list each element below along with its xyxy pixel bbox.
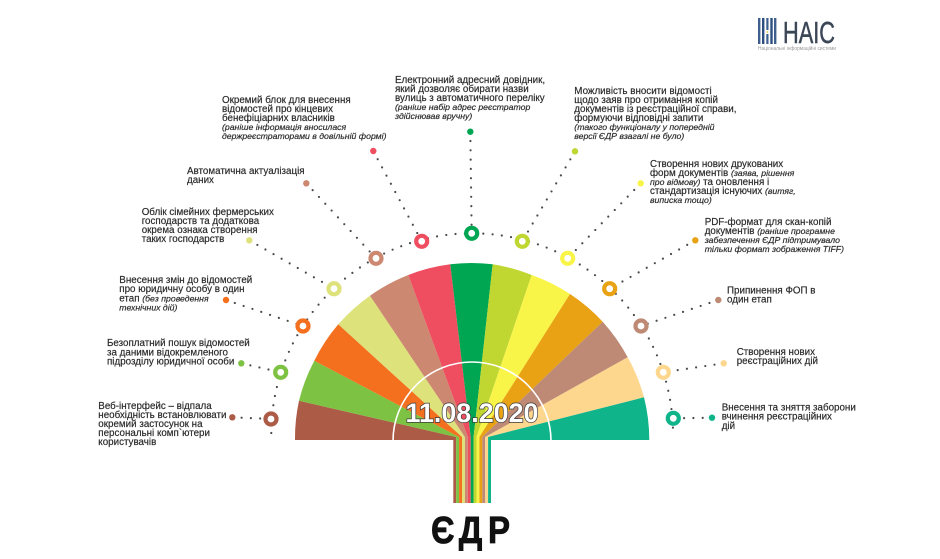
callout: address directory: (раніше набір адрес реєстратор — [395, 102, 530, 112]
callout: PDF format: PDF-формат для скан-копій — [705, 217, 831, 228]
callout: web interface: окремий застосунок на — [98, 419, 203, 430]
callout: prohibition entry and removal: вчинення реєстраційних — [722, 412, 832, 423]
fan segment: green — [299, 361, 459, 503]
fan segment: amber — [479, 294, 603, 503]
callout: prohibition entry and removal — [668, 402, 856, 432]
callout: beneficial owners: Окремий блок для внесення — [222, 95, 351, 106]
logo: NAIS: Національні інформаційні системи — [758, 45, 836, 52]
fan segment: yellow-green — [474, 264, 532, 503]
fan segment: peach — [485, 357, 644, 503]
callout: new registration actions — [658, 347, 818, 378]
callout: address directory — [394, 75, 545, 239]
callout: legal entity changes: про юридичну особу в один — [119, 284, 245, 295]
callout: FOP termination — [636, 286, 815, 332]
callout: legal entity changes: етап (без проведення — [119, 293, 209, 304]
callout: address directory: який дозволяє обирати назви — [395, 84, 529, 95]
callout: web interface — [98, 401, 276, 448]
callout: FOP termination: Припинення ФОП в — [727, 286, 815, 296]
callout: PDF format: документів (раніше програмне — [705, 226, 835, 237]
callout: new printed forms: виписка тощо) — [650, 195, 712, 205]
callout: PDF format: забезпечення ЄДР підтримувало — [704, 235, 840, 245]
callout: copies of documents: щодо заяв про отримання копій — [574, 95, 718, 106]
callout: copies of documents: документів із реєстраційної справи, — [574, 104, 736, 115]
callout: copies of documents: формуючи відповідні запити — [574, 113, 703, 124]
logo: NAIS: НАІС — [783, 15, 835, 50]
callout: address directory: здійснював вручну) — [394, 111, 472, 121]
fan chart — [295, 263, 649, 503]
callout: beneficial owners — [222, 95, 427, 247]
callout: address directory: вулиць з автоматичного переліку — [395, 93, 545, 104]
fan segment: brown — [295, 401, 456, 503]
callout: free search — [107, 338, 286, 378]
callout: web interface: необхідність встановлювати — [98, 410, 227, 421]
callout: legal entity changes: Внесення змін до відомостей — [119, 275, 252, 286]
callout: copies of documents: версії ЄДР взагалі не було) — [574, 131, 684, 141]
callout: free search: за даними відокремленого — [107, 347, 228, 358]
dotted arc through the rings — [271, 233, 673, 433]
callout: beneficial owners: (раніше інформація вносилася — [222, 122, 346, 132]
callout: new printed forms: Створення нових друкованих — [650, 159, 783, 170]
callout: free search: Безоплатний пошук відомостей — [107, 338, 250, 349]
date label: 11.08.2020 — [406, 398, 538, 428]
fan segment: pale lime — [338, 296, 465, 503]
callout: FOP termination: один етап — [727, 295, 772, 306]
callout: family farms — [142, 207, 340, 294]
callout: PDF format — [604, 217, 844, 294]
fan segment: red — [408, 264, 471, 503]
callout: prohibition entry and removal: Внесення та зняття заборони — [722, 402, 856, 414]
fan segment: yellow — [476, 275, 570, 503]
callout: copies of documents — [517, 86, 736, 247]
callout: new registration actions: Створення нових — [737, 347, 815, 358]
fan segment: salmon — [370, 275, 468, 503]
callout: new printed forms: форм документів (заява, рішення — [650, 168, 794, 179]
title: ЄДР: ЄДР — [431, 509, 510, 552]
callout: legal entity changes: технічних дій) — [119, 303, 177, 313]
callout: beneficial owners: держреєстраторами в довільній формі) — [222, 131, 387, 141]
callout: address directory: Електронний адресний довідник, — [395, 75, 545, 86]
callout: new printed forms: стандартизація існуючих (витяг, — [650, 186, 796, 197]
callout: automatic update: даних — [187, 175, 214, 186]
callout: web interface: Веб-інтерфейс – відпала — [98, 401, 212, 412]
callout: beneficial owners: бенефіціарних власників — [222, 113, 335, 124]
callout: new registration actions: реєстраційних дій — [737, 356, 818, 367]
callout: family farms: Облік сімейних фермерських — [142, 207, 274, 218]
callout: beneficial owners: відомостей про кінцевих — [222, 104, 333, 115]
callout: PDF format: тільки формат зображення TIFF) — [705, 244, 844, 254]
fan segment: dark green — [450, 263, 493, 503]
callout: free search: підрозділу юридичної особи — [107, 356, 234, 367]
callout: new printed forms: про відмову) та оновлення і — [650, 177, 769, 188]
callout: copies of documents: Можливість вносити відомості — [574, 86, 712, 97]
callout: automatic update: Автоматична актуалізація — [187, 166, 305, 177]
callout: legal entity changes — [119, 275, 308, 332]
callout: automatic update — [187, 166, 382, 264]
inner white arc — [393, 362, 551, 441]
callout: family farms: таких господарств — [142, 234, 224, 245]
callout: copies of documents: (такого функціоналу у попередній — [574, 122, 715, 132]
fan segment: teal — [488, 397, 649, 503]
callout: prohibition entry and removal: дій — [722, 421, 735, 432]
callout: web interface: персональні комп`ютери — [98, 428, 210, 439]
callout: web interface: користувачів — [98, 437, 156, 448]
logo: NAIS — [758, 15, 836, 52]
callout: family farms: окрема ознака створення — [142, 225, 258, 236]
fan segment: orange — [314, 324, 462, 503]
callout: new printed forms — [562, 159, 796, 264]
callout: family farms: господарств та додаткова — [142, 216, 260, 227]
fan segment: tan — [482, 322, 628, 503]
